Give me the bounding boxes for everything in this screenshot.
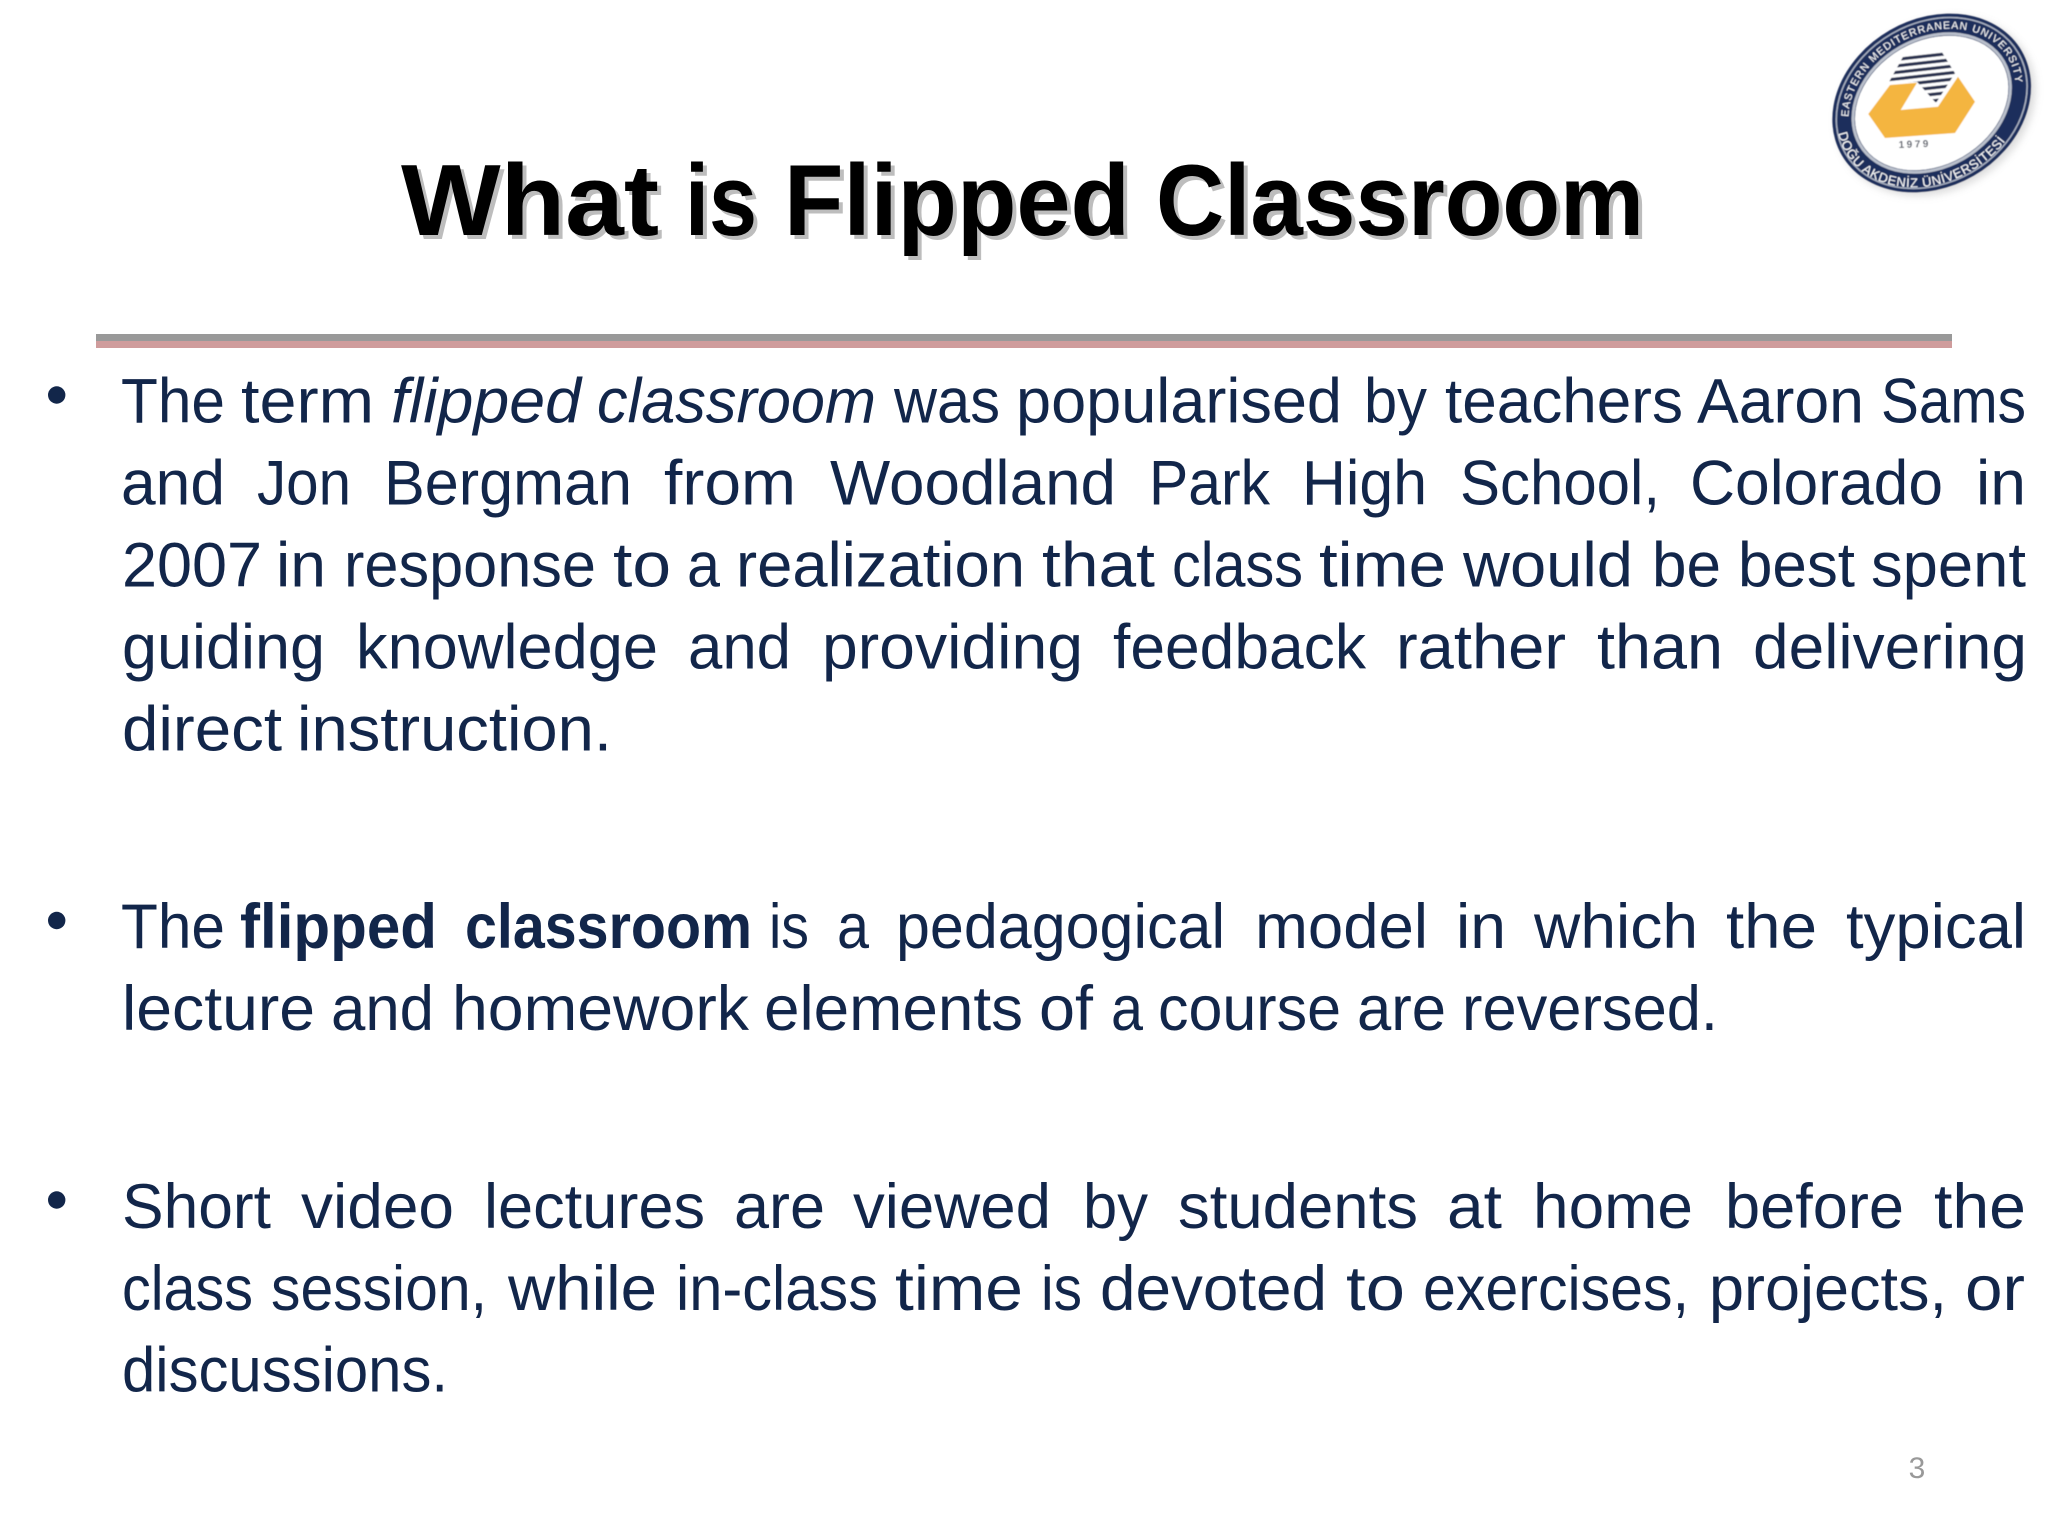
bullet point 3: video lectures at home, activities in class: Short: [122, 1172, 271, 1242]
bullet point 2: definition of the flipped classroom: in: [1456, 892, 1506, 962]
bullet point 1: origin of the term: Sams: [1881, 367, 2026, 437]
bullet point 2: definition of the flipped classroom: lecture: [122, 974, 315, 1044]
bullet point 1: origin of the term: time: [1319, 531, 1446, 601]
bullet point 1: origin of the term: be: [1652, 531, 1721, 601]
title: [401, 145, 1644, 257]
bullet point 3: video lectures at home, activities in class: students: [1178, 1172, 1418, 1242]
bullet point 2: definition of the flipped classroom: The: [121, 892, 225, 962]
bullet point 2: definition of the flipped classroom: a: [837, 892, 870, 962]
bullet point 1: origin of the term: direct: [122, 695, 283, 765]
bullet point 3: video lectures at home, activities in class: lectures: [484, 1172, 705, 1242]
bullet point 1: origin of the term: guiding: [122, 613, 325, 683]
bullet point 1: origin of the term: a: [687, 531, 721, 601]
bullet point 1: origin of the term: from: [664, 449, 796, 519]
logo: Eastern Mediterranean University seal: DOĞU AKDENİZ ÜNİVERSİTESİ: [1838, 131, 2006, 188]
bullet point 1: origin of the term: in: [276, 531, 326, 601]
bullet point 1: origin of the term: flipped: [391, 367, 583, 437]
bullet point 2: definition of the flipped classroom: typical: [1846, 892, 2026, 962]
bullet point 2: definition of the flipped classroom: of: [1039, 974, 1094, 1044]
bullet point 3: video lectures at home, activities in class: video: [301, 1172, 454, 1242]
bullet point 2: definition of the flipped classroom: and: [331, 974, 434, 1044]
bullet point 3: video lectures at home, activities in class: by: [1083, 1172, 1148, 1242]
bullet point 1: origin of the term: realization: [736, 531, 1025, 601]
bullet point 1: origin of the term: response: [344, 531, 596, 601]
bullet point 2: definition of the flipped classroom: homework: [452, 974, 750, 1044]
bullet point 1: origin of the term: Park: [1149, 449, 1270, 519]
bullet point 3: video lectures at home, activities in class: session,: [271, 1254, 487, 1324]
bullet point 2: definition of the flipped classroom: [48, 892, 2026, 1044]
bullet point 3: video lectures at home, activities in class: viewed: [853, 1172, 1051, 1242]
slide number: 3: [1909, 1452, 1925, 1485]
bullet point 2: definition of the flipped classroom: model: [1255, 892, 1428, 962]
bullet point 1: origin of the term: would: [1462, 531, 1633, 601]
bullet point 3: video lectures at home, activities in class: time: [895, 1254, 1023, 1324]
bullet point 2: definition of the flipped classroom: which: [1533, 892, 1698, 962]
bullet point 1: origin of the term: The: [121, 367, 225, 437]
bullet point 3: video lectures at home, activities in class: at: [1447, 1172, 1503, 1242]
bullet point 1: origin of the term: best: [1738, 531, 1855, 601]
bullet point 3: video lectures at home, activities in class: to: [1346, 1254, 1405, 1324]
bullet point 1: origin of the term: class: [1172, 531, 1303, 601]
bullet point 3: video lectures at home, activities in class: class: [122, 1254, 253, 1324]
title: is: [685, 145, 757, 257]
bullet point 1: origin of the term: that: [1042, 531, 1156, 601]
bullet point 2: definition of the flipped classroom: is: [769, 892, 809, 962]
bullet point 1: origin of the term: than: [1597, 613, 1723, 683]
bullet point 3: video lectures at home, activities in class: or: [1965, 1254, 2025, 1324]
bullet point 3: video lectures at home, activities in class: projects,: [1709, 1254, 1947, 1324]
bullet point 1: origin of the term: by: [1364, 367, 1427, 437]
bullet point 1: origin of the term: to: [613, 531, 671, 601]
title: Classroom: [1156, 145, 1644, 257]
bullet marker 3: [48, 1191, 65, 1209]
bullet point 1: origin of the term: rather: [1396, 613, 1566, 683]
bullet marker 1: [48, 386, 65, 404]
bullet point 1: origin of the term: instruction.: [297, 695, 612, 765]
bullet point 1: origin of the term: High: [1302, 449, 1427, 519]
bullet point 1: origin of the term: Bergman: [384, 449, 632, 519]
bullet point 3: video lectures at home, activities in class: before: [1725, 1172, 1904, 1242]
bullet point 2: definition of the flipped classroom: a: [1111, 974, 1144, 1044]
bullet point 3: video lectures at home, activities in class: home: [1533, 1172, 1693, 1242]
title divider rule: [96, 334, 1952, 348]
bullet point 3: video lectures at home, activities in class: are: [734, 1172, 825, 1242]
bullet point 1: origin of the term: knowledge: [356, 613, 658, 683]
bullet point 1: origin of the term: Aaron: [1697, 367, 1864, 437]
bullet point 1: origin of the term: School,: [1460, 449, 1660, 519]
bullet point 2: definition of the flipped classroom: elements: [764, 974, 1023, 1044]
bullet point 2: definition of the flipped classroom: course: [1158, 974, 1341, 1044]
bullet point 3: video lectures at home, activities in class: in-class: [676, 1254, 878, 1324]
bullet point 2: definition of the flipped classroom: pedagogical: [896, 892, 1225, 962]
title: Flipped: [784, 145, 1130, 257]
bullet point 3: video lectures at home, activities in class: while: [507, 1254, 657, 1324]
bullet point 1: origin of the term: Woodland: [830, 449, 1116, 519]
bullet point 1: origin of the term: feedback: [1113, 613, 1366, 683]
bullet point 1: origin of the term: spent: [1871, 531, 2026, 601]
bullet point 3: video lectures at home, activities in class: discussions.: [122, 1336, 448, 1406]
bullet point 1: origin of the term: popularised: [1016, 367, 1342, 437]
title: What: [401, 145, 659, 257]
bullet point 3: video lectures at home, activities in class: exercises,: [1423, 1254, 1689, 1324]
bullet point 1: origin of the term: providing: [822, 613, 1083, 683]
bullet marker 2: [48, 912, 65, 929]
bullet point 2: definition of the flipped classroom: are: [1357, 974, 1446, 1044]
bullet point 3: video lectures at home, activities in class: [48, 1172, 2026, 1406]
logo: Eastern Mediterranean University seal: [1832, 12, 2038, 198]
bullet point 1: origin of the term: was: [893, 367, 1000, 437]
bullet point 1: origin of the term: classroom: [597, 367, 876, 437]
bullet point 1: origin of the term: Colorado: [1690, 449, 1943, 519]
bullet point 2: definition of the flipped classroom: flipped: [240, 892, 437, 962]
bullet point 3: video lectures at home, activities in class: is: [1041, 1254, 1082, 1324]
bullet point 1: origin of the term: Jon: [257, 449, 351, 519]
logo: Eastern Mediterranean University seal: EASTERN MEDITERRANEAN UNIVERSITY: [1840, 20, 2024, 117]
bullet point 3: video lectures at home, activities in class: devoted: [1100, 1254, 1327, 1324]
bullet point 1: origin of the term: 2007: [122, 531, 262, 601]
bullet point 1: origin of the term: term: [241, 367, 374, 437]
bullet point 3: video lectures at home, activities in class: the: [1934, 1172, 2026, 1242]
bullet point 1: origin of the term: [48, 367, 2027, 765]
bullet point 1: origin of the term: delivering: [1753, 613, 2027, 683]
bullet point 1: origin of the term: and: [121, 449, 225, 519]
bullet point 1: origin of the term: in: [1976, 449, 2026, 519]
bullet point 1: origin of the term: teachers: [1445, 367, 1683, 437]
bullet point 2: definition of the flipped classroom: the: [1726, 892, 1817, 962]
bullet point 1: origin of the term: and: [688, 613, 791, 683]
logo: Eastern Mediterranean University seal: 1979: [1898, 139, 1931, 151]
bullet point 2: definition of the flipped classroom: reversed.: [1462, 974, 1718, 1044]
bullet point 2: definition of the flipped classroom: classroom: [465, 892, 752, 962]
